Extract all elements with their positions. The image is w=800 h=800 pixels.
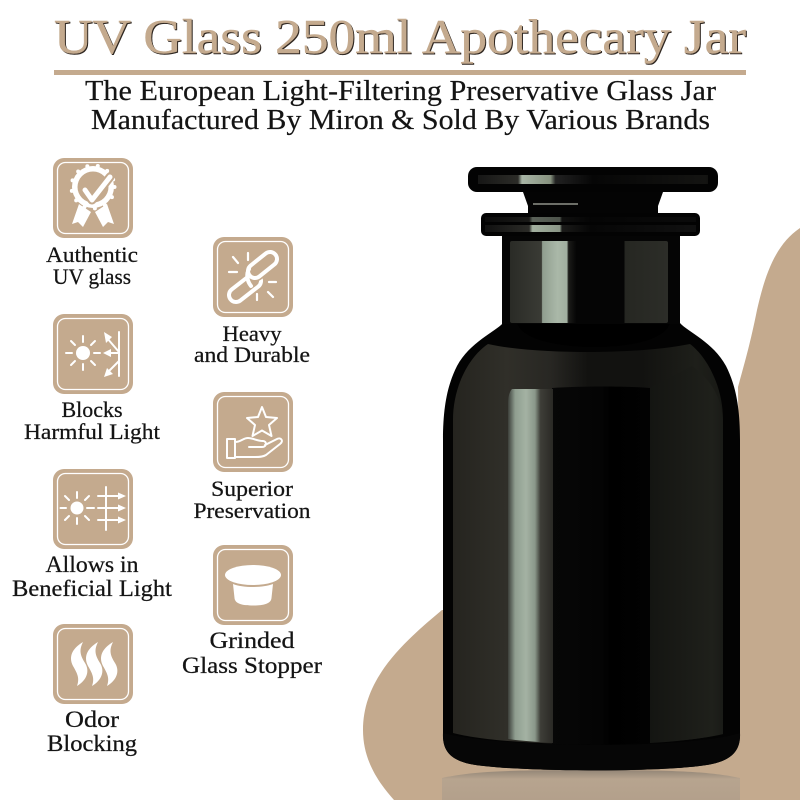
- icon: chain link: [213, 237, 293, 317]
- right sheen: [650, 366, 723, 743]
- icon: sun with passing arrows: [53, 469, 133, 549]
- icon: sun with deflected arrows: [53, 314, 133, 394]
- feature: odor blocking: [47, 624, 138, 756]
- title: UV Glass 250ml Apothecary Jar: [54, 9, 746, 64]
- feature: heavy and durable: [194, 237, 310, 367]
- feature: grinded glass stopper: Glass Stopper: [182, 653, 322, 678]
- icon: odor waves: [53, 624, 133, 704]
- stopper cap: [468, 167, 718, 192]
- label: Blocks: [62, 397, 122, 422]
- feature: blocks harmful light: Harmful Light: [24, 419, 160, 444]
- label: Authentic: [46, 242, 138, 267]
- jar silhouette: [443, 323, 740, 770]
- left highlight: [508, 389, 553, 743]
- feature: superior preservation: Preservation: [194, 498, 310, 523]
- feature: authentic UV glass: [46, 158, 138, 289]
- label: Grinded: [210, 628, 295, 653]
- subtitle: The European Light-Filtering Preservative Glass Jar: [85, 76, 717, 107]
- icon: rosette with check: [53, 158, 133, 238]
- stopper neck: [523, 192, 663, 213]
- label: Odor: [65, 707, 119, 732]
- feature: odor blocking: Blocking: [47, 731, 138, 756]
- feature: blocks harmful light: [24, 314, 160, 444]
- jar reflection: [442, 770, 740, 800]
- feature: authentic UV glass: UV glass: [53, 264, 131, 289]
- neck shadow: [517, 323, 670, 347]
- centre black band: [552, 386, 650, 745]
- feature: allows beneficial light: [12, 469, 173, 601]
- feature: superior preservation: [194, 392, 310, 523]
- jar base: [443, 733, 740, 770]
- label: Heavy: [222, 321, 282, 346]
- feature: grinded glass stopper: [182, 545, 322, 678]
- jar lip: [481, 213, 700, 236]
- background blob: [363, 228, 800, 800]
- apothecary jar: [443, 167, 740, 770]
- subtitle: Manufactured By Miron & Sold By Various Brands: [91, 105, 710, 136]
- icon: hand holding star: [213, 392, 293, 472]
- subtitle: [85, 76, 717, 136]
- label: Superior: [211, 476, 294, 501]
- jar neck: [502, 236, 680, 324]
- icon: glass stopper: [213, 545, 293, 625]
- title rule: [54, 70, 746, 75]
- feature: allows beneficial light: Beneficial Light: [12, 576, 173, 601]
- feature: heavy and durable: and Durable: [194, 342, 310, 367]
- jar inner glass: [453, 344, 723, 744]
- label: Allows in: [46, 552, 139, 577]
